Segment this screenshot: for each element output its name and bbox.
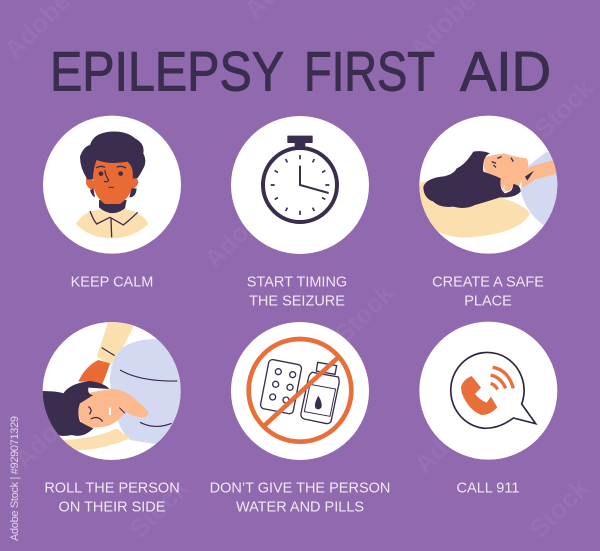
background watermarks: Stock (528, 73, 600, 144)
watermark: stock id: Adobe Stock | #929071329 (9, 416, 21, 541)
label: start timing: THE SEIZURE (249, 294, 345, 310)
label: call 911: CALL 911 (457, 480, 519, 496)
label: roll the person: ON THEIR SIDE (59, 500, 166, 516)
icon: person on side (40, 322, 183, 460)
background watermarks: Adobe (198, 196, 276, 274)
background watermarks: Stock (123, 473, 195, 544)
background watermarks: Stock (523, 473, 595, 544)
background watermarks: Stock (328, 278, 400, 349)
label: safe place: CREATE A SAFE (432, 274, 544, 290)
panel: start timing (231, 116, 369, 309)
panel: keep calm (43, 116, 181, 290)
title (50, 40, 551, 102)
panel: roll the person (40, 322, 183, 516)
title: EPILEPSY (50, 40, 284, 102)
label: start timing: START TIMING (247, 274, 347, 290)
icon: calm person (43, 116, 181, 254)
label: safe place: PLACE (464, 294, 512, 310)
label: no water or pills: WATER AND PILLS (236, 500, 364, 516)
label: roll the person: ROLL THE PERSON (44, 480, 180, 496)
panel: no water or pills (210, 322, 390, 516)
background watermarks: Adobe (408, 401, 486, 479)
icon: person lying down (417, 116, 563, 254)
background watermarks: Adobe (8, 396, 86, 474)
icon: phone in speech bubble (419, 322, 557, 460)
title: FIRST (304, 40, 435, 102)
icon: stopwatch (231, 116, 369, 254)
title: AID (460, 40, 551, 102)
label: no water or pills: DON’T GIVE THE PERSON (210, 480, 390, 496)
panel: call 911 (419, 322, 557, 496)
icon: prohibited pills and bottle (231, 322, 369, 460)
label: keep calm: KEEP CALM (71, 274, 153, 290)
panel: safe place (417, 116, 563, 309)
